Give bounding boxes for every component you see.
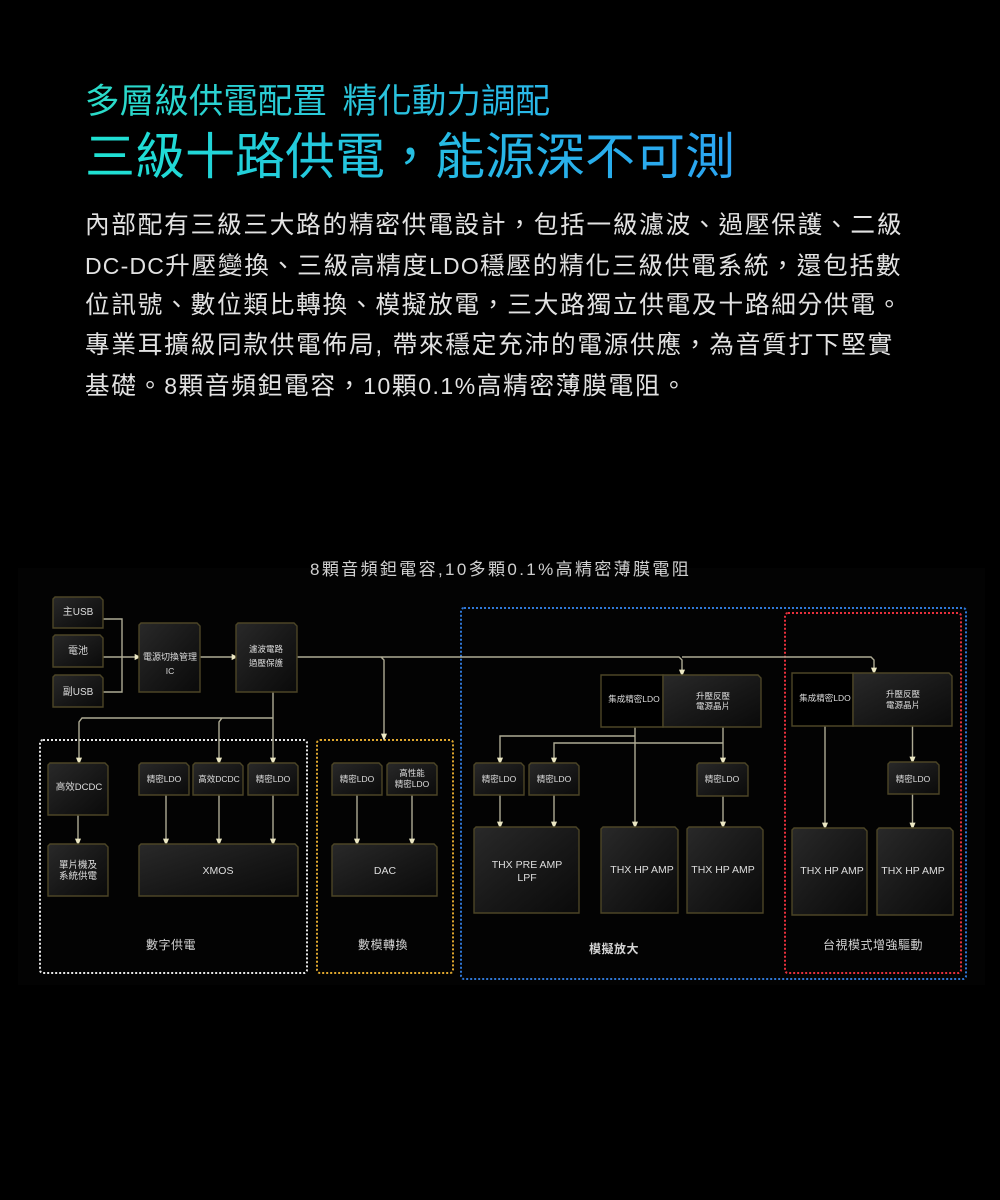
chip: precision LDO 1: 精密LDO: [147, 774, 182, 784]
chip: integrated LDO and boost, analog: 集成精密LDO: [608, 694, 660, 704]
chip: THX pre amp: LPF: [517, 872, 537, 884]
chip: high performance LDO: 高性能: [399, 768, 425, 778]
chip: filter and protection: 濾波電路: [249, 644, 283, 654]
panel: TV mode drive frame: [785, 613, 961, 973]
arrowheads: [76, 654, 915, 845]
chip: XMOS: [139, 844, 298, 896]
chip: precision LDO 2: [248, 763, 298, 795]
chip: THX pre amp: [474, 827, 579, 913]
chip: TV mode LDO: [888, 762, 939, 794]
chip: analog LDO 1: [474, 763, 524, 795]
chip: THX HP amp 3: THX HP AMP: [800, 865, 864, 877]
label: DA conversion: 數模轉換: [358, 938, 408, 952]
chip: DCDC: [48, 763, 108, 815]
chip: filter and protection: [236, 623, 297, 692]
panel: analog amplification frame: [461, 608, 966, 979]
chip: precision LDO 1: [139, 763, 189, 795]
label: analog amplification: 模擬放大: [589, 941, 639, 956]
chip: DAC LDO: [332, 763, 382, 795]
chip: integrated LDO and boost, analog: 電源晶片: [696, 701, 730, 711]
title: subheading: 多層級供電配置 精化動力調配: [85, 83, 550, 121]
chip: MCU and system supply: 單片機及: [59, 859, 97, 871]
chip: power switch IC: 電源切換管理: [143, 651, 197, 662]
chip: DAC: DAC: [374, 865, 397, 877]
text block: description: 專業耳擴級同款供電佈局, 帶來穩定充沛的電源供應，為音質打下堅實: [85, 332, 894, 359]
chip: high performance LDO: 精密LDO: [395, 779, 430, 789]
chip: secondary USB: 副USB: [63, 686, 94, 698]
chip: analog LDO 3: [697, 763, 748, 796]
panel: digital supply frame: [40, 740, 307, 973]
text block: description: 位訊號、數位類比轉換、模擬放電，三大路獨立供電及十路細分供電。: [85, 292, 903, 319]
chip: analog LDO 2: 精密LDO: [537, 774, 572, 784]
chip: integrated LDO and boost, TV mode: 升壓反壓: [886, 689, 920, 699]
chip: power switch IC: [139, 623, 200, 692]
caption: diagram title: 8顆音頻鉭電容,10多顆0.1%高精密薄膜電阻: [310, 560, 691, 579]
chip: THX HP amp 4: [877, 828, 953, 915]
chip: MCU and system supply: [48, 844, 108, 896]
connector lines: [78, 619, 912, 841]
text block: description: 內部配有三級三大路的精密供電設計，包括一級濾波、過壓保護、二級: [85, 212, 903, 239]
chip: battery: [53, 635, 103, 667]
chip: THX pre amp: THX PRE AMP: [492, 859, 562, 871]
chip: analog LDO 3: 精密LDO: [705, 774, 740, 784]
chip: battery: 電池: [68, 644, 88, 657]
chip: DCDC 2: 高效DCDC: [198, 774, 240, 784]
text block: description: DC-DC升壓變換、三級高精度LDO穩壓的精化三級供電系統，還包括數: [85, 253, 902, 280]
chip: DAC: [332, 844, 437, 896]
chip: main USB: [53, 597, 103, 628]
chip: high performance LDO: [387, 763, 437, 795]
chip: DCDC: 高效DCDC: [56, 781, 102, 793]
chip: THX HP amp 4: THX HP AMP: [881, 865, 945, 877]
chip: MCU and system supply: 系統供電: [59, 870, 97, 882]
chip: integrated LDO and boost, analog: 升壓反壓: [696, 691, 730, 701]
chip: THX HP amp 2: THX HP AMP: [691, 864, 755, 876]
chip: secondary USB: [53, 675, 103, 707]
chip: power switch IC: IC: [166, 666, 174, 676]
chip: THX HP amp 2: [687, 827, 763, 913]
chip: THX HP amp 1: [601, 827, 678, 913]
text block: description: [85, 212, 903, 400]
chip: DCDC 2: [193, 763, 243, 795]
chip: integrated LDO and boost, TV mode: 電源晶片: [886, 700, 920, 710]
chip: DAC LDO: 精密LDO: [340, 774, 375, 784]
chip: filter and protection: 過壓保護: [249, 658, 283, 668]
chip: TV mode LDO: 精密LDO: [896, 774, 931, 784]
chip: THX HP amp 1: THX HP AMP: [610, 864, 674, 876]
title: main heading: 三級十路供電，能源深不可測: [85, 129, 735, 185]
text block: description: 基礎。8顆音頻鉭電容，10顆0.1%高精密薄膜電阻。: [85, 373, 688, 400]
chip: analog LDO 1: 精密LDO: [482, 774, 517, 784]
panel: DA conversion frame: [317, 740, 453, 973]
chip: THX HP amp 3: [792, 828, 867, 915]
chip: analog LDO 2: [529, 763, 579, 795]
chip: main USB: 主USB: [63, 606, 94, 618]
chip: integrated LDO and boost, TV mode: 集成精密LDO: [799, 693, 851, 703]
label: digital supply: 數字供電: [146, 937, 196, 952]
chip: XMOS: XMOS: [203, 865, 233, 877]
chip: precision LDO 2: 精密LDO: [256, 774, 291, 784]
label: TV mode drive: 台視模式增強驅動: [823, 937, 923, 952]
chip: integrated LDO and boost, TV mode: [792, 673, 952, 726]
chip: integrated LDO and boost, analog: [601, 675, 761, 727]
